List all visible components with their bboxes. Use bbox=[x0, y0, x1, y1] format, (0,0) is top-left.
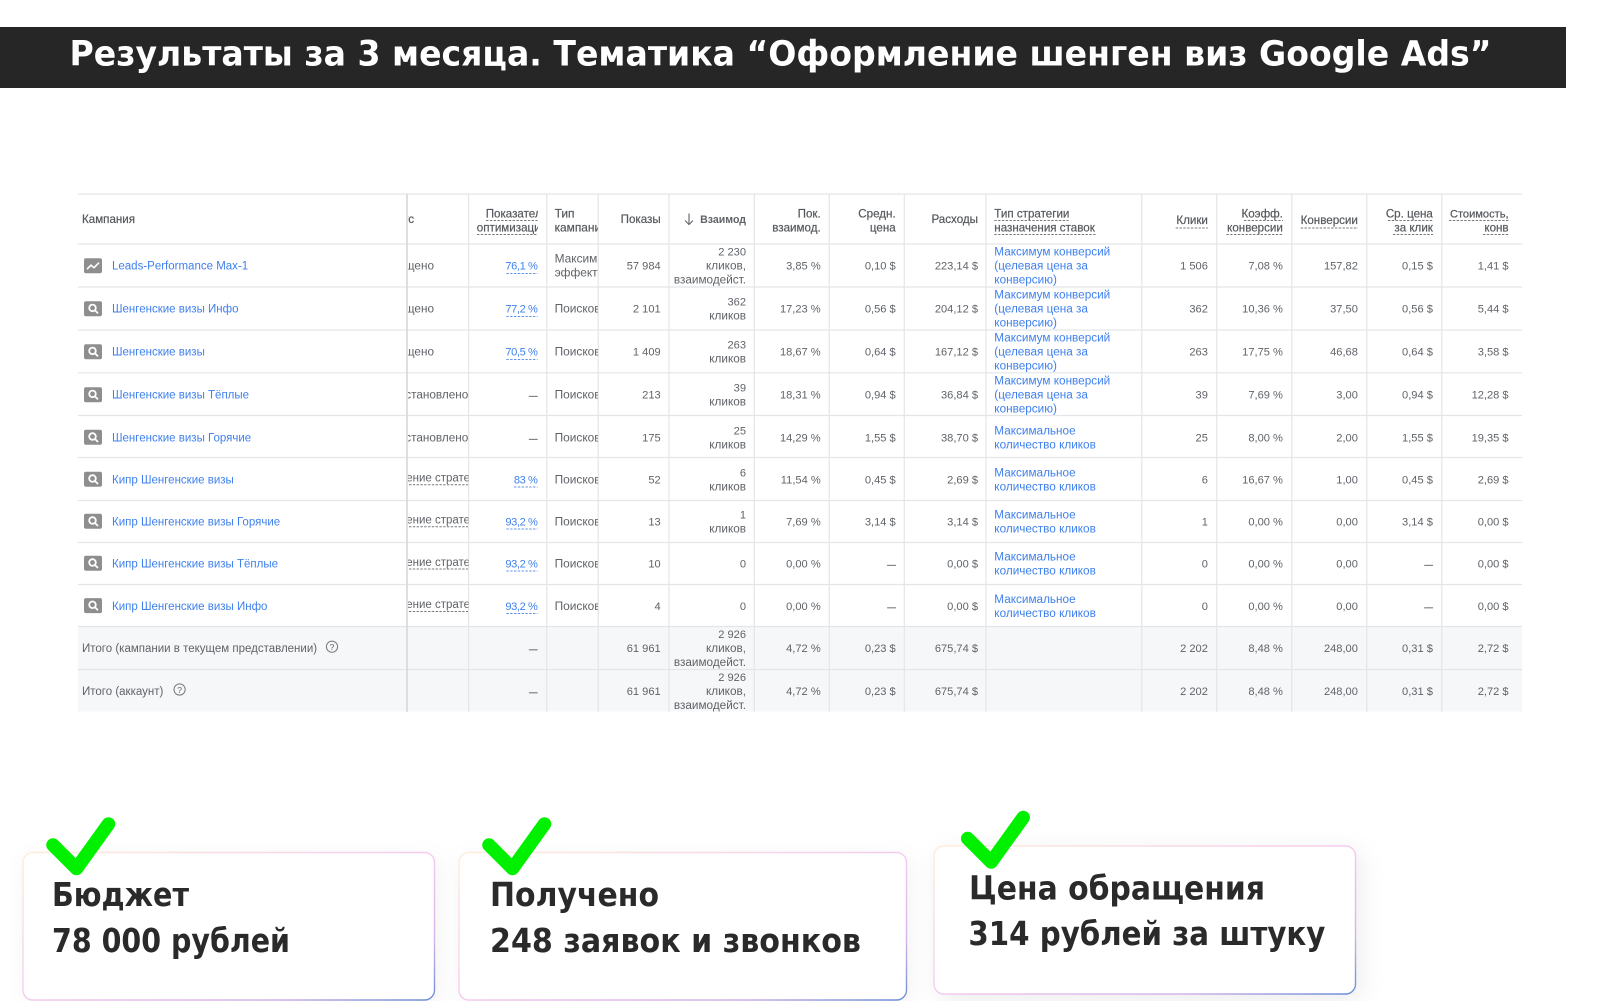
row: Шенгенские визы Инфо: 0,56 $ bbox=[1402, 304, 1433, 316]
row: Кипр Шенгенские визы Горячие: 0,00 % bbox=[1248, 516, 1283, 528]
icon: search bbox=[84, 598, 102, 613]
row: Leads-Performance Max-1: 0,10 $ bbox=[865, 261, 896, 273]
row: Leads-Performance Max-1: конверсию) bbox=[994, 274, 1057, 287]
row: Кипр Шенгенские визы Горячие: 0,00 $ bbox=[1478, 516, 1509, 528]
icon: help: ? bbox=[330, 642, 335, 652]
row: Шенгенские визы Инфо: 204,12 $ bbox=[935, 304, 978, 316]
icon: search bbox=[84, 514, 102, 529]
totals row: current view: — bbox=[529, 644, 538, 654]
row: Шенгенские визы Инфо: 5,44 $ bbox=[1478, 304, 1509, 316]
row: Кипр Шенгенские визы Горячие: 3,14 $ bbox=[865, 516, 896, 528]
row: Шенгенские визы Тёплые: 7,69 % bbox=[1248, 390, 1283, 402]
icon: sort arrow bbox=[685, 214, 693, 224]
row: Кипр Шенгенские визы Инфо: 0 bbox=[740, 601, 746, 613]
table header: Статус bbox=[377, 213, 414, 226]
row: Leads-Performance Max-1: кликов, bbox=[706, 260, 746, 273]
row: Шенгенские визы Тёплые: 213 bbox=[642, 390, 661, 402]
row: Кипр Шенгенские визы Тёплые: Изменение стратегии bbox=[372, 557, 487, 569]
row: Шенгенские визы Горячие: 25 bbox=[1196, 432, 1208, 444]
row: Шенгенские визы Горячие: Максимальное bbox=[994, 424, 1076, 437]
row: Шенгенские визы Горячие: 1,55 $ bbox=[1402, 432, 1433, 444]
row: Шенгенские визы Тёплые: — bbox=[529, 391, 538, 401]
row: Шенгенские визы Горячие: Поисковая bbox=[555, 430, 614, 444]
totals row: account: кликов, bbox=[706, 685, 746, 698]
totals row: account: 2 926 bbox=[718, 672, 746, 684]
table header: Кампания bbox=[82, 213, 135, 226]
totals row: current view: 2 202 bbox=[1180, 643, 1208, 655]
table header: Конверсии bbox=[1301, 214, 1358, 227]
row: Кипр Шенгенские визы: Изменение стратегии bbox=[372, 473, 487, 485]
totals row: account: 248,00 bbox=[1324, 686, 1358, 698]
row: Кипр Шенгенские визы Горячие: 13 bbox=[648, 516, 661, 528]
totals row: account: 0,31 $ bbox=[1402, 686, 1433, 698]
row: Кипр Шенгенские визы: 0,45 $ bbox=[1402, 474, 1433, 486]
row: Шенгенские визы Горячие: количество кликов bbox=[994, 438, 1096, 451]
row: Кипр Шенгенские визы Тёплые: — bbox=[887, 559, 896, 569]
row: Шенгенские визы Тёплые: Поисковая bbox=[555, 388, 614, 402]
row: Кипр Шенгенские визы Тёплые bbox=[84, 552, 1508, 574]
row: Кипр Шенгенские визы Инфо: количество кликов bbox=[994, 607, 1096, 620]
row: Кипр Шенгенские визы: 11,54 % bbox=[781, 474, 821, 486]
row: Шенгенские визы Инфо: 2 101 bbox=[633, 304, 661, 316]
row: Кипр Шенгенские визы Тёплые: — bbox=[1424, 559, 1433, 569]
icon: green check bbox=[968, 818, 1023, 862]
row: Leads-Performance Max-1: Максимум конверсий bbox=[994, 246, 1110, 259]
row: Кипр Шенгенские визы: 2,69 $ bbox=[947, 474, 978, 486]
row: Шенгенские визы Горячие bbox=[84, 426, 1508, 448]
row: Шенгенские визы Тёплые: Максимум конверсий bbox=[994, 375, 1110, 388]
row: Кипр Шенгенские визы Инфо: 4 bbox=[655, 601, 661, 613]
row: Шенгенские визы Тёплые: 39 bbox=[1196, 390, 1208, 402]
row: Leads-Performance Max-1 bbox=[84, 246, 1509, 287]
row: Шенгенские визы Тёплые: кликов bbox=[709, 396, 746, 409]
icon: help bbox=[326, 641, 338, 652]
totals row: current view: 4,72 % bbox=[786, 643, 821, 655]
row: Кипр Шенгенские визы Инфо: Кипр Шенгенские визы Инфо bbox=[112, 601, 267, 613]
row: Кипр Шенгенские визы Горячие: Максимальное bbox=[994, 508, 1076, 521]
row: Шенгенские визы Инфо: Максимум конверсий bbox=[994, 289, 1110, 302]
totals row: current view bbox=[82, 629, 1509, 669]
card: received bbox=[459, 824, 906, 1000]
row: Кипр Шенгенские визы Тёплые: 0,00 bbox=[1336, 558, 1358, 570]
row: Кипр Шенгенские визы Горячие: 1 bbox=[740, 509, 746, 521]
row: Кипр Шенгенские визы Тёплые: 10 bbox=[648, 558, 661, 570]
row: Шенгенские визы: Шенгенские визы bbox=[112, 347, 205, 359]
table header: Пок. bbox=[798, 208, 821, 220]
table header: Взаимод bbox=[700, 214, 746, 226]
row: Кипр Шенгенские визы Тёплые: 93,2 % bbox=[505, 558, 538, 570]
icon: green check bbox=[53, 824, 108, 868]
row: Шенгенские визы Инфо: кликов bbox=[709, 310, 746, 323]
icon: help: ? bbox=[177, 685, 182, 695]
row: Кипр Шенгенские визы Горячие: Кипр Шенгенские визы Горячие bbox=[112, 516, 280, 528]
icon: performance max bbox=[84, 258, 102, 273]
totals row: account: 0,23 $ bbox=[865, 686, 896, 698]
table header: Показатель bbox=[486, 208, 548, 220]
totals row: account: взаимодейст. bbox=[674, 699, 746, 712]
row: Кипр Шенгенские визы: Кипр Шенгенские визы bbox=[112, 474, 234, 486]
totals row: account: 8,48 % bbox=[1248, 686, 1283, 698]
row: Leads-Performance Max-1: 57 984 bbox=[627, 261, 661, 273]
table header: Тип стратегии bbox=[994, 208, 1069, 220]
card: budget bbox=[23, 824, 434, 1000]
row: Leads-Performance Max-1: (целевая цена за bbox=[994, 260, 1088, 273]
row: Кипр Шенгенские визы: 83 % bbox=[514, 474, 538, 486]
row: Шенгенские визы Тёплые: 36,84 $ bbox=[941, 390, 978, 402]
row: Шенгенские визы bbox=[84, 332, 1509, 373]
table header: Средн. bbox=[858, 208, 896, 220]
row: Шенгенские визы: Запущено bbox=[379, 346, 434, 359]
totals row: current view: взаимодейст. bbox=[674, 656, 746, 669]
row: Шенгенские визы Тёплые: конверсию) bbox=[994, 403, 1057, 416]
row: Кипр Шенгенские визы Инфо: — bbox=[1424, 602, 1433, 612]
row: Кипр Шенгенские визы Горячие: 3,14 $ bbox=[1402, 516, 1433, 528]
row: Кипр Шенгенские визы Инфо: Изменение стратегии bbox=[372, 599, 487, 611]
row: Шенгенские визы: 1 409 bbox=[633, 347, 661, 359]
table header: Стоимость, bbox=[1450, 208, 1509, 220]
row: Кипр Шенгенские визы: Максимальное bbox=[994, 466, 1076, 479]
row: Шенгенские визы Горячие: 19,35 $ bbox=[1472, 432, 1509, 444]
totals row: current view: 8,48 % bbox=[1248, 643, 1283, 655]
row: Шенгенские визы Тёплые: (целевая цена за bbox=[994, 389, 1088, 402]
row: Кипр Шенгенские визы Инфо: Максимальное bbox=[994, 593, 1076, 606]
row: Кипр Шенгенские визы: 2,69 $ bbox=[1478, 474, 1509, 486]
icon: search bbox=[84, 430, 102, 445]
row: Кипр Шенгенские визы Инфо: Поисковая bbox=[555, 599, 614, 613]
row: Шенгенские визы: Поисковая bbox=[555, 345, 614, 359]
row: Шенгенские визы: 17,75 % bbox=[1242, 347, 1283, 359]
row: Шенгенские визы Горячие: кликов bbox=[709, 438, 746, 451]
row: Шенгенские визы Горячие: 8,00 % bbox=[1248, 432, 1283, 444]
totals row: account: 2 202 bbox=[1180, 686, 1208, 698]
totals row: current view: 61 961 bbox=[627, 643, 661, 655]
totals row: current view: 2 926 bbox=[718, 629, 746, 641]
row: Leads-Performance Max-1: 0,15 $ bbox=[1402, 261, 1433, 273]
table header: взаимод. bbox=[772, 222, 821, 234]
row: Шенгенские визы Горячие: 38,70 $ bbox=[941, 432, 978, 444]
totals row: current view: кликов, bbox=[706, 642, 746, 655]
table header: оптимизации bbox=[477, 222, 547, 234]
row: Шенгенские визы: 0,64 $ bbox=[1402, 347, 1433, 359]
row: Шенгенские визы Инфо: 77,2 % bbox=[505, 304, 538, 316]
row: Шенгенские визы Инфо: 362 bbox=[727, 297, 746, 309]
row: Шенгенские визы Инфо bbox=[84, 289, 1509, 330]
row: Кипр Шенгенские визы Горячие: 1 bbox=[1202, 516, 1208, 528]
totals row: account: 61 961 bbox=[627, 686, 661, 698]
row: Шенгенские визы: 18,67 % bbox=[780, 347, 821, 359]
row: Кипр Шенгенские визы Горячие: 0,00 bbox=[1336, 516, 1358, 528]
row: Кипр Шенгенские визы Тёплые: Максимальное bbox=[994, 550, 1076, 563]
totals row: current view: Итого (кампании в текущем представлении) bbox=[82, 643, 317, 655]
row: Шенгенские визы: конверсию) bbox=[994, 360, 1057, 373]
table header: конв bbox=[1484, 222, 1509, 234]
row: Кипр Шенгенские визы Горячие: Изменение стратегии bbox=[372, 515, 487, 527]
campaigns table bbox=[78, 194, 1522, 712]
totals row: account: 675,74 $ bbox=[935, 686, 978, 698]
icon: search bbox=[84, 344, 102, 359]
row: Шенгенские визы Инфо: Поисковая bbox=[555, 302, 614, 316]
row: Шенгенские визы: 3,58 $ bbox=[1478, 347, 1509, 359]
card: received: Получено bbox=[490, 875, 659, 914]
row: Кипр Шенгенские визы Горячие: 7,69 % bbox=[786, 516, 821, 528]
row: Шенгенские визы Тёплые: 18,31 % bbox=[780, 390, 821, 402]
row: Кипр Шенгенские визы Горячие bbox=[84, 510, 1508, 532]
table header: Ср. цена bbox=[1386, 208, 1433, 220]
row: Шенгенские визы Инфо: 37,50 bbox=[1330, 304, 1358, 316]
row: Кипр Шенгенские визы Тёплые: 0,00 % bbox=[786, 558, 821, 570]
row: Leads-Performance Max-1: 223,14 $ bbox=[935, 261, 978, 273]
totals row: current view: 248,00 bbox=[1324, 643, 1358, 655]
row: Шенгенские визы Горячие: Не установлено bbox=[381, 431, 469, 444]
row: Шенгенские визы: 46,68 bbox=[1330, 347, 1358, 359]
row: Кипр Шенгенские визы Тёплые: Поисковая bbox=[555, 556, 614, 570]
row: Кипр Шенгенские визы Тёплые: Кипр Шенгенские визы Тёплые bbox=[112, 558, 278, 570]
row: Кипр Шенгенские визы Тёплые: 0 bbox=[1202, 558, 1208, 570]
row: Кипр Шенгенские визы: 52 bbox=[648, 474, 661, 486]
title: Результаты за 3 месяца. Тематика “Оформление шенген виз Google Ads” bbox=[70, 34, 1492, 74]
row: Шенгенские визы Инфо: 0,56 $ bbox=[865, 304, 896, 316]
row: Кипр Шенгенские визы Тёплые: 0,00 % bbox=[1248, 558, 1283, 570]
row: Шенгенские визы Горячие: 1,55 $ bbox=[865, 432, 896, 444]
row: Шенгенские визы Тёплые: 0,94 $ bbox=[1402, 390, 1433, 402]
row: Шенгенские визы Инфо: Запущено bbox=[379, 303, 434, 316]
totals row: account: 4,72 % bbox=[786, 686, 821, 698]
row: Шенгенские визы: 167,12 $ bbox=[935, 347, 978, 359]
row: Кипр Шенгенские визы Горячие: Поисковая bbox=[555, 514, 614, 528]
row: Leads-Performance Max-1: 3,85 % bbox=[786, 261, 821, 273]
row: Leads-Performance Max-1: Запущено bbox=[379, 260, 434, 273]
table header: Тип bbox=[555, 206, 574, 220]
row: Кипр Шенгенские визы Инфо: 93,2 % bbox=[505, 601, 538, 613]
totals row: current view: 0,23 $ bbox=[865, 643, 896, 655]
totals row: current view: 0,31 $ bbox=[1402, 643, 1433, 655]
row: Шенгенские визы: 263 bbox=[727, 340, 746, 352]
row: Leads-Performance Max-1: Leads-Performance Max-1 bbox=[112, 261, 248, 273]
row: Шенгенские визы Тёплые: 12,28 $ bbox=[1472, 390, 1509, 402]
row: Шенгенские визы Горячие: Шенгенские визы Горячие bbox=[112, 432, 251, 444]
row: Шенгенские визы: 0,64 $ bbox=[865, 347, 896, 359]
table header: за клик bbox=[1394, 222, 1434, 234]
row: Шенгенские визы Горячие: 25 bbox=[734, 425, 746, 437]
row: Кипр Шенгенские визы Тёплые: 0,00 $ bbox=[947, 558, 978, 570]
row: Кипр Шенгенские визы Инфо: 0 bbox=[1202, 601, 1208, 613]
row: Leads-Performance Max-1: эффективность bbox=[555, 266, 641, 280]
row: Шенгенские визы Тёплые bbox=[84, 375, 1509, 416]
row: Leads-Performance Max-1: взаимодейст. bbox=[674, 274, 746, 287]
row: Шенгенские визы Горячие: 2,00 bbox=[1336, 432, 1358, 444]
icon: search bbox=[84, 301, 102, 316]
row: Шенгенские визы: 263 bbox=[1189, 347, 1208, 359]
row: Шенгенские визы Горячие: 14,29 % bbox=[780, 432, 821, 444]
row: Leads-Performance Max-1: Максимальная bbox=[555, 252, 637, 266]
row: Кипр Шенгенские визы: 6 bbox=[1202, 474, 1208, 486]
row: Кипр Шенгенские визы Инфо: — bbox=[887, 602, 896, 612]
table header: кампании bbox=[555, 220, 608, 234]
table header: Клики bbox=[1176, 214, 1208, 227]
row: Кипр Шенгенские визы Инфо: 0,00 bbox=[1336, 601, 1358, 613]
row: Шенгенские визы: кликов bbox=[709, 353, 746, 366]
icon: search bbox=[84, 472, 102, 487]
row: Шенгенские визы Инфо: 10,36 % bbox=[1242, 304, 1283, 316]
row: Leads-Performance Max-1: 7,08 % bbox=[1248, 261, 1283, 273]
row: Кипр Шенгенские визы: количество кликов bbox=[994, 480, 1096, 493]
row: Шенгенские визы: Максимум конверсий bbox=[994, 332, 1110, 345]
row: Шенгенские визы Тёплые: 3,00 bbox=[1336, 390, 1358, 402]
totals row: account: Итого (аккаунт) bbox=[82, 686, 164, 698]
row: Кипр Шенгенские визы: кликов bbox=[709, 480, 746, 493]
row: Кипр Шенгенские визы Инфо: 0,00 % bbox=[1248, 601, 1283, 613]
table header: цена bbox=[870, 222, 896, 234]
row: Кипр Шенгенские визы: 6 bbox=[740, 467, 746, 479]
totals row: account: 2,72 $ bbox=[1478, 686, 1509, 698]
row: Кипр Шенгенские визы Инфо: 0,00 % bbox=[786, 601, 821, 613]
table header: Показы bbox=[621, 213, 661, 226]
table header: конверсии bbox=[1227, 222, 1283, 234]
totals row: current view: 675,74 $ bbox=[935, 643, 978, 655]
row: Шенгенские визы Тёплые: 0,94 $ bbox=[865, 390, 896, 402]
row: Шенгенские визы Горячие: — bbox=[529, 433, 538, 443]
icon: search bbox=[84, 387, 102, 402]
table header: Коэфф. bbox=[1241, 208, 1283, 220]
row: Leads-Performance Max-1: 76,1 % bbox=[505, 261, 538, 273]
card: budget: Бюджет bbox=[52, 875, 189, 914]
row: Leads-Performance Max-1: 1 506 bbox=[1180, 261, 1208, 273]
row: Кипр Шенгенские визы bbox=[84, 468, 1508, 490]
row: Кипр Шенгенские визы Тёплые: количество кликов bbox=[994, 564, 1096, 577]
row: Шенгенские визы Инфо: конверсию) bbox=[994, 317, 1057, 330]
row: Leads-Performance Max-1: 1,41 $ bbox=[1478, 261, 1509, 273]
table header: назначения ставок bbox=[994, 222, 1096, 234]
row: Шенгенские визы Инфо: (целевая цена за bbox=[994, 303, 1088, 316]
card: cost per lead: 314 рублей за штуку bbox=[968, 914, 1325, 953]
row: Шенгенские визы Инфо: 362 bbox=[1189, 304, 1208, 316]
row: Кипр Шенгенские визы Тёплые: 0 bbox=[740, 558, 746, 570]
row: Шенгенские визы Инфо: Шенгенские визы Инфо bbox=[112, 304, 239, 316]
title bar bbox=[0, 27, 1566, 88]
icon: search bbox=[84, 556, 102, 571]
row: Leads-Performance Max-1: 157,82 bbox=[1324, 261, 1358, 273]
row: Кипр Шенгенские визы Тёплые: 0,00 $ bbox=[1478, 558, 1509, 570]
row: Кипр Шенгенские визы: 0,45 $ bbox=[865, 474, 896, 486]
row: Кипр Шенгенские визы Инфо: 0,00 $ bbox=[947, 601, 978, 613]
card: cost per lead bbox=[934, 818, 1356, 994]
row: Кипр Шенгенские визы: 16,67 % bbox=[1242, 474, 1283, 486]
row: Leads-Performance Max-1: 2 230 bbox=[718, 247, 746, 259]
row: Шенгенские визы Горячие: 175 bbox=[642, 432, 661, 444]
row: Кипр Шенгенские визы Горячие: количество кликов bbox=[994, 522, 1096, 535]
row: Кипр Шенгенские визы Горячие: 93,2 % bbox=[505, 516, 538, 528]
totals row: account: — bbox=[529, 687, 538, 697]
row: Кипр Шенгенские визы: 1,00 bbox=[1336, 474, 1358, 486]
row: Шенгенские визы: 70,5 % bbox=[505, 347, 538, 359]
totals row: current view: 2,72 $ bbox=[1478, 643, 1509, 655]
row: Кипр Шенгенские визы: Поисковая bbox=[555, 472, 614, 486]
row: Шенгенские визы Тёплые: Шенгенские визы Тёплые bbox=[112, 390, 249, 402]
card: received: 248 заявок и звонков bbox=[490, 921, 861, 960]
icon: green check bbox=[489, 824, 544, 868]
card: cost per lead: Цена обращения bbox=[969, 868, 1265, 908]
row: Шенгенские визы: (целевая цена за bbox=[994, 346, 1088, 359]
table header bbox=[82, 206, 1509, 234]
row: Кипр Шенгенские визы Инфо bbox=[84, 594, 1508, 617]
card: budget: 78 000 рублей bbox=[52, 921, 290, 960]
row: Шенгенские визы Инфо: 17,23 % bbox=[780, 304, 821, 316]
row: Шенгенские визы Тёплые: Не установлено bbox=[381, 389, 469, 402]
totals row: account bbox=[82, 672, 1509, 712]
row: Кипр Шенгенские визы Горячие: 3,14 $ bbox=[947, 516, 978, 528]
row: Кипр Шенгенские визы Горячие: кликов bbox=[709, 522, 746, 535]
row: Шенгенские визы Тёплые: 39 bbox=[734, 383, 746, 395]
icon: help bbox=[174, 684, 185, 695]
table header: Расходы bbox=[931, 213, 978, 226]
row: Кипр Шенгенские визы Инфо: 0,00 $ bbox=[1478, 601, 1509, 613]
